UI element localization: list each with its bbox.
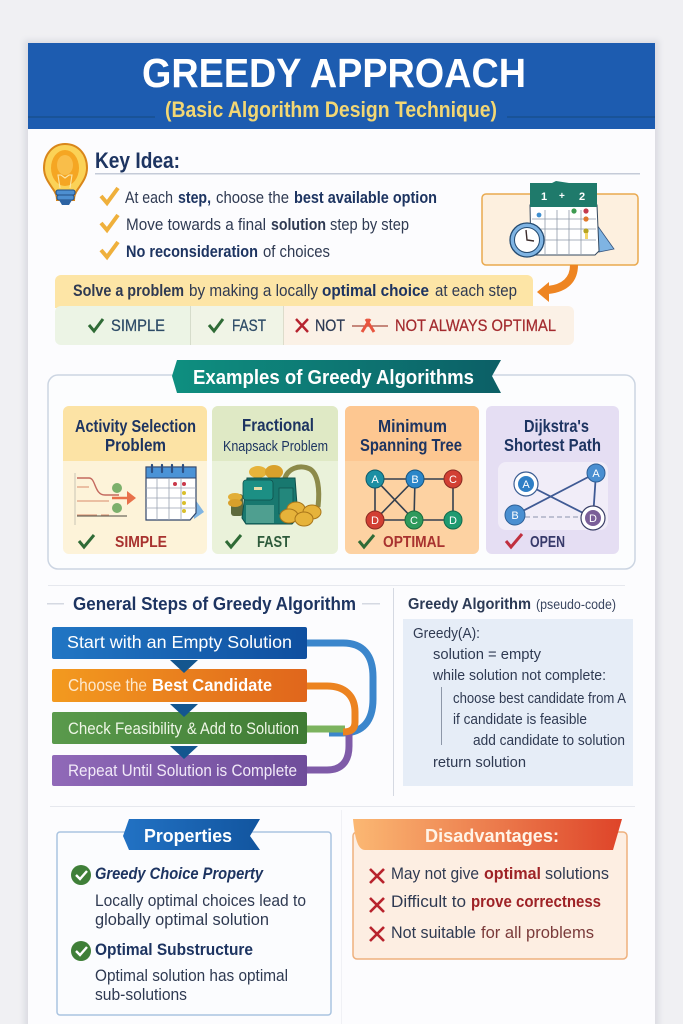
title: GREEDY APPROACH (142, 50, 526, 96)
traits strip: NOT (315, 316, 345, 335)
summary bar: Solve a problem (73, 281, 184, 300)
step 2: Best Candidate (152, 675, 272, 695)
property: optimal substructure: sub-solutions (95, 986, 187, 1004)
disadvantage list: Not suitable (391, 924, 476, 942)
examples ribbon heading: Examples of Greedy Algorithms (193, 366, 474, 389)
graph: spanning tree: C (449, 474, 457, 486)
graph: spanning tree (366, 470, 462, 529)
disadvantages ribbon: Disadvantages: (425, 825, 559, 846)
calendar and clock illustration (482, 181, 638, 265)
examples ribbon heading (172, 360, 501, 393)
disadvantage list (370, 865, 609, 942)
property: greedy choice (71, 864, 306, 929)
property: optimal substructure (71, 940, 288, 1004)
disadvantage list: May not give (391, 865, 479, 883)
graph: spanning tree: D (371, 515, 379, 527)
card: dijkstra: OPEN (530, 534, 565, 551)
key idea bullet list: step by step (330, 216, 409, 234)
graph: spanning tree: C (410, 515, 418, 527)
card: dijkstra: Shortest Path (504, 435, 601, 455)
calendar and clock illustration: 1 (541, 191, 547, 203)
key idea bullet list: No reconsideration (126, 243, 258, 261)
key idea bullet list: choose the (216, 189, 289, 207)
card: dijkstra (486, 406, 619, 554)
traits strip (55, 306, 574, 345)
pseudo-code box: choose best candidate from A (453, 690, 626, 707)
graph: shortest path: A (522, 479, 530, 491)
card: fractional knapsack: Fractional (242, 415, 314, 435)
step arrows (170, 660, 198, 759)
card: fractional knapsack: Knapsack Problem (223, 439, 328, 455)
pseudo-code box: if candidate is feasible (453, 711, 587, 728)
disadvantage list: prove correctness (471, 893, 601, 911)
property: optimal substructure: Optimal solution has optimal (95, 967, 288, 985)
disadvantage list: Difficult to (391, 893, 466, 911)
activity chart icon (75, 473, 136, 525)
loop connectors (305, 643, 373, 770)
pseudo-code box: return solution (433, 754, 526, 771)
title banner (28, 43, 655, 129)
calendar and clock illustration: 2 (579, 191, 585, 203)
step 3: Check Feasibility (68, 720, 183, 738)
card: minimum spanning tree: Minimum (378, 416, 447, 436)
disadvantage list: solutions (545, 865, 609, 883)
calendar and clock illustration: + (559, 191, 565, 202)
subtitle: (Basic Algorithm Design Technique) (165, 97, 497, 122)
pseudo-code box: solution = empty (433, 646, 541, 663)
step 4: Repeat Until Solution is Complete (68, 762, 297, 780)
card: dijkstra: Dijkstra's (524, 416, 589, 436)
key idea bullet list: solution (271, 216, 326, 234)
pseudo-code box: add candidate to solution (473, 732, 625, 749)
panel: examples (48, 360, 635, 569)
card: fractional knapsack: FAST (257, 534, 290, 551)
step 4 (52, 755, 307, 786)
graph: shortest path: A (592, 468, 600, 480)
heading: key idea: Key Idea: (95, 148, 180, 173)
step 2 (52, 669, 307, 702)
disadvantage list: for all problems (481, 924, 594, 942)
graph: shortest path: D (589, 513, 597, 525)
step 3 (52, 712, 307, 744)
property: greedy choice: globally optimal solution (95, 911, 269, 929)
calendar icon (146, 465, 204, 520)
key idea bullet list: of choices (263, 243, 330, 261)
pseudo-code box: Greedy(A): (413, 625, 480, 642)
traits strip: FAST (232, 316, 266, 335)
summary bar (55, 275, 533, 308)
panel: disadvantages (353, 819, 627, 959)
graph: spanning tree: D (449, 515, 457, 527)
summary bar: optimal choice (322, 281, 429, 300)
step 1: Start with an Empty Solution (67, 632, 292, 652)
properties ribbon (123, 819, 260, 850)
heading: pseudo-code: Greedy Algorithm (408, 596, 531, 613)
graph: spanning tree: B (411, 474, 419, 486)
graph: shortest path: B (511, 510, 519, 522)
card: activity selection: Activity Selection (75, 416, 196, 436)
card: minimum spanning tree: Spanning Tree (360, 435, 462, 455)
steps flow (52, 627, 373, 786)
disadvantage list: optimal (484, 865, 541, 883)
backpack icon (228, 465, 321, 526)
step 1 (52, 627, 307, 659)
card: activity selection (63, 406, 207, 554)
key idea bullet list: At each (125, 189, 173, 207)
key idea bullet list (101, 188, 437, 261)
graph: spanning tree: A (371, 474, 379, 486)
property: greedy choice: Locally optimal choices lead to (95, 892, 306, 910)
step 2: Choose the (68, 675, 147, 695)
pseudo-code box (403, 619, 633, 786)
icon: light bulb (44, 144, 87, 205)
traits strip: SIMPLE (111, 316, 165, 335)
heading: pseudo-code (408, 596, 616, 613)
summary bar: at each step (435, 281, 517, 300)
card: fractional knapsack (212, 406, 338, 554)
card: minimum spanning tree (345, 406, 479, 554)
arrow: calendar to summary (537, 265, 574, 302)
property: greedy choice: Greedy Choice Property (95, 864, 264, 883)
summary bar: by making a locally (189, 281, 318, 300)
property: optimal substructure: Optimal Substructure (95, 940, 253, 959)
pseudo-code box: while solution not complete: (432, 667, 606, 684)
panel: properties (57, 819, 331, 1015)
key idea bullet list: step, (178, 189, 211, 207)
step 3: & Add to Solution (187, 720, 299, 738)
disadvantages ribbon (353, 819, 622, 850)
properties ribbon: Properties (144, 825, 232, 846)
graph: shortest path (498, 462, 608, 530)
card: activity selection: SIMPLE (115, 534, 167, 551)
card: activity selection: Problem (105, 435, 166, 455)
key idea bullet list: Move towards a final (126, 216, 266, 234)
key idea bullet list: best available option (294, 189, 437, 207)
card: minimum spanning tree: OPTIMAL (383, 534, 445, 551)
heading: general steps: General Steps of Greedy Algorithm (73, 593, 356, 614)
traits strip: NOT ALWAYS OPTIMAL (395, 316, 556, 335)
heading: pseudo-code: (pseudo-code) (536, 597, 616, 612)
